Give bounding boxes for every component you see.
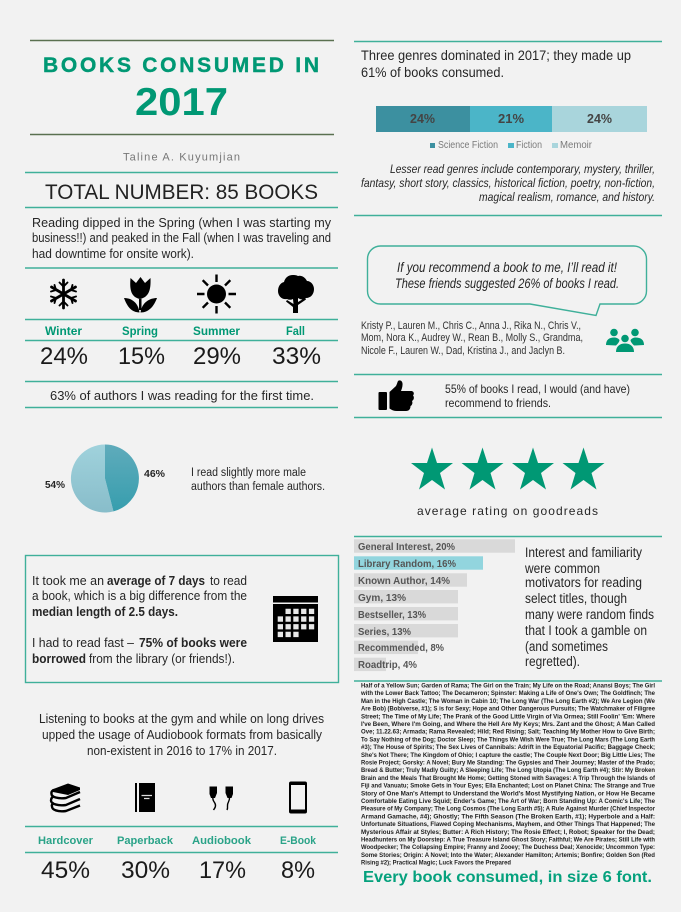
icon: e-reader phone xyxy=(289,782,307,814)
bar chart: reading motivators: Gym, 13% xyxy=(358,592,407,604)
panel: reading speed xyxy=(26,556,338,682)
bar chart: reading motivators: Known Author, 14% xyxy=(358,575,451,587)
book list: Brain and the Meals That Brought Me Home; Getting Stoned with Savages: A Trip Through the Islands of xyxy=(361,776,656,782)
lesser read genres note: magical realism, romance, and history. xyxy=(479,190,655,204)
callout: speech bubble: If you recommend a book to me, I’ll read it! xyxy=(397,260,617,275)
title: BOOKS CONSUMED IN xyxy=(43,54,319,77)
seasons table: 33% xyxy=(272,343,321,370)
motivators text: Interest and familiarity xyxy=(525,545,642,560)
panel: reading speed: 75% of books were xyxy=(139,636,247,650)
seasonal reading text xyxy=(25,216,338,268)
book list: Fiji and Vanuatu; Smoke Gets in Your Eyes; Ella Enchanted; Lost on Planet China: The Strange and True xyxy=(361,784,656,790)
formats table xyxy=(25,826,338,884)
first-time authors callout: 63% of authors I was reading for the first time. xyxy=(50,388,314,403)
bar chart: reading motivators: Bestseller, 13% xyxy=(358,609,427,621)
book list: She's Not There; The Kingdom of Ohio; I capture the castle; The Couple Next Door; Big Little Lies; The xyxy=(361,753,656,759)
formats table: Paperback xyxy=(117,835,174,847)
book list: I've Been, Where I'm Going, and Where the Hell Are My Keys; Mrs. Zant and the Ghost; A Man Called xyxy=(361,722,655,728)
panel: reading speed: I had to read fast – xyxy=(32,636,134,650)
bar chart: reading motivators: Library Random, 16% xyxy=(358,558,457,570)
motivators text: motivators for reading xyxy=(525,575,642,590)
bar chart: reading motivators: General Interest, 20% xyxy=(358,541,456,553)
panel: reading speed: average of 7 days xyxy=(107,574,205,588)
formats table: E-Book xyxy=(280,835,317,847)
book list: To Say Nothing of the Dog; Doctor Sleep; The Things We Wish Were True; The Long Mars (The Long Earth xyxy=(361,737,655,743)
friends list xyxy=(361,320,583,357)
seasonal reading text: had downtime for onsite work). xyxy=(32,247,194,261)
icon: paperback book xyxy=(135,783,155,812)
motivators text: that I took a gamble on xyxy=(525,623,647,638)
seasons table: Fall xyxy=(286,324,305,338)
callout: speech bubble: These friends suggested 26% of books I read. xyxy=(395,276,619,291)
book list xyxy=(354,681,662,867)
book list: Armand Gamache, #4); Ghostly; The Fifth Season (The Broken Earth, #1); Hyperbole and a Half: xyxy=(361,814,655,820)
four star rating xyxy=(411,448,604,490)
book list: Man in the High Castle; The Woman in Cabin 10; The Long War (The Long Earth #2); We Are Legion (We xyxy=(361,699,656,705)
icon: tree xyxy=(278,275,314,313)
motivators text xyxy=(524,545,654,669)
bar chart: reading motivators: Roadtrip, 4% xyxy=(358,659,418,671)
seasons table: 24% xyxy=(40,343,88,370)
audiobook text: non-existent in 2016 to 17% in 2017. xyxy=(87,744,277,758)
book list: Ove; 11.22.63; Armada; Rama Revealed; Hild; Red Rising; Salt; Teaching My Mother How to Give Birth; xyxy=(361,730,655,736)
recommend callout: recommend to friends. xyxy=(445,396,551,410)
author gender text: I read slightly more male xyxy=(191,467,306,479)
chart legend: Memoir xyxy=(560,140,593,151)
formats table: 45% xyxy=(41,857,90,884)
seasons table: Spring xyxy=(122,324,158,338)
bar chart: reading motivators: Recommended, 8% xyxy=(358,642,445,654)
panel: reading speed: from the library (or friends!). xyxy=(89,652,235,666)
recommend callout xyxy=(354,374,662,418)
book list: Comfortable Eating Live Squid; Ender's Game; The Art of War; Born Standing Up: A Comic's Life; The xyxy=(361,799,656,805)
formats table: 17% xyxy=(199,857,246,884)
author gender text xyxy=(191,467,325,493)
rating caption: average rating on goodreads xyxy=(417,504,598,518)
genres intro text: 61% of books consumed. xyxy=(361,65,504,80)
formats table: 30% xyxy=(121,857,170,884)
bar chart: reading motivators xyxy=(354,536,662,671)
motivators text: select titles, though xyxy=(525,591,627,606)
book list: Unfortunate Situations, Flawed Coping Mechanisms, Mayhem, and Other Things That Happened; The xyxy=(361,822,656,828)
author name: Taline A. Kuyumjian xyxy=(123,152,240,164)
book list: Half of a Yellow Sun; Garden of Rama; The Girl on the Train; My Life on the Road; Anansi Boys; The Girl xyxy=(361,684,655,690)
motivators text: (and sometimes xyxy=(525,639,608,654)
pie chart: author gender: 46% xyxy=(144,468,166,480)
stacked bar chart: genres: 21% xyxy=(498,111,524,126)
stacked bar chart: genres: 24% xyxy=(410,111,435,126)
audiobook text: Listening to books at the gym and while on long drives xyxy=(39,712,324,726)
chart legend xyxy=(430,140,593,151)
seasons table: 29% xyxy=(193,343,241,370)
book list caption: Every book consumed, in size 6 font. xyxy=(363,869,652,886)
book list: #3); The House of Spirits; The Sex Lives of Cannibals: Adrift in the Equatorial Pacific; Baggage Check; xyxy=(361,745,655,751)
seasons table: Winter xyxy=(45,324,82,338)
book list: Woodpecker; The Collapsing Empire; Franny and Zooey; The Duchess Deal; Xenocide; Uncommon Type: xyxy=(361,845,655,851)
book list: Mysterious Affair at Styles; Butter: A Rich History; The Rosie Effect; I, Robot; Speaker for the Dead; xyxy=(361,830,655,836)
book list: Are Bob) (Bobiverse, #1); S is for Sexy; Hope and Other Dangerous Pursuits; The Watchmaker of Filigree xyxy=(361,707,656,713)
book list: Headhunters on My Doorstep: A True Treasure Island Ghost Story; Faithful; We Are Pirates; Still Life with xyxy=(361,838,655,844)
panel: reading speed: to read xyxy=(210,574,247,588)
seasonal reading text: Reading dipped in the Spring (when I was starting my xyxy=(32,216,332,230)
pie chart: author gender xyxy=(45,444,166,512)
book list: Rosie Project; Gorsky: A Novel; Bury Me Standing: The Gypsies and Their Journey; Master of the Prado; xyxy=(361,760,655,766)
formats table: Hardcover xyxy=(38,835,94,847)
friends list: Kristy P., Lauren M., Chris C., Anna J., Rika N., Chris V., xyxy=(361,320,581,332)
book list: Rising #2); Practical Magic; Luck Favors the Prepared xyxy=(361,861,511,867)
icon: thumbs up xyxy=(378,380,414,411)
chart legend: Science Fiction xyxy=(438,140,498,151)
seasonal reading text: business!!) and peaked in the Fall (when I was traveling and xyxy=(32,231,331,245)
seasons table xyxy=(25,320,338,370)
author gender text: authors than female authors. xyxy=(191,481,325,493)
title: 2017 xyxy=(135,81,228,124)
panel: reading speed: borrowed xyxy=(32,652,86,666)
icon: calendar xyxy=(273,596,318,642)
formats table: Audiobook xyxy=(192,835,252,847)
panel: reading speed: median length of 2.5 days. xyxy=(32,605,178,619)
seasons table: 15% xyxy=(118,343,165,370)
title xyxy=(30,40,334,134)
icon: sun xyxy=(197,274,236,314)
icon: snowflake xyxy=(51,280,76,308)
formats table: 8% xyxy=(281,857,315,884)
stacked bar chart: genres: 24% xyxy=(587,111,612,126)
icon: group of people xyxy=(606,329,644,352)
book list: Street; The Time of My Life; The Prank of the Good Little Virgin of Via Ormea; Still Foolin' 'Em: Where xyxy=(361,714,656,720)
icon: earphones xyxy=(210,786,233,810)
book list: with the Lower Back Tattoo; The Decameron; Spinster: Making a Life of One's Own; The Goldfinch; The xyxy=(360,691,656,697)
motivators text: were common xyxy=(524,561,600,576)
recommend callout: 55% of books I read, I would (and have) xyxy=(445,382,630,396)
motivators text: regretted). xyxy=(525,654,580,669)
icon: stack of books xyxy=(51,784,80,811)
motivators text: many were random finds xyxy=(525,607,654,622)
lesser read genres note xyxy=(354,162,662,216)
seasons table: Summer xyxy=(193,324,240,338)
book list: Story of One Man's Attempt to Understand the World's Most Mystifying Nation, or How He Became xyxy=(361,791,656,797)
pie chart: author gender: 54% xyxy=(45,479,66,491)
audiobook text: upped the usage of Audiobook formats from basically xyxy=(42,728,323,742)
book list: Bread & Butter; Truly Madly Guilty; A Sleeping Life; The Long Utopia (The Long Earth #4); Stir: My Broken xyxy=(361,768,655,774)
genres intro text: Three genres dominated in 2017; they made up xyxy=(361,48,631,63)
total number heading: TOTAL NUMBER: 85 BOOKS xyxy=(45,181,318,204)
friends list: Mom, Nora K., Audrey W., Rean B., Molly S., Grandma, xyxy=(361,332,583,344)
audiobook text xyxy=(39,712,324,758)
genres intro text xyxy=(354,42,662,80)
panel: reading speed: a book, which is a big difference from the xyxy=(32,589,247,603)
callout: speech bubble xyxy=(367,246,647,316)
friends list: Nicole F., Lauren W., Dad, Kristina J., and Jaclyn B. xyxy=(361,345,565,357)
bar chart: reading motivators: Series, 13% xyxy=(358,626,412,638)
book list: Some Stories; Origin: A Novel; Into the Water; Alexander Hamilton; Artemis; Bonfire; Golden Son (Red xyxy=(361,853,655,859)
chart legend: Fiction xyxy=(516,140,542,151)
panel: reading speed: It took me an xyxy=(32,574,104,588)
book list: Pleasure of My Company; The Long Cosmos (The Long Earth #5); A Rule Against Murder (Chief Inspector xyxy=(361,807,656,813)
icon: tulip xyxy=(124,277,157,312)
stacked bar chart: genres xyxy=(376,106,647,132)
